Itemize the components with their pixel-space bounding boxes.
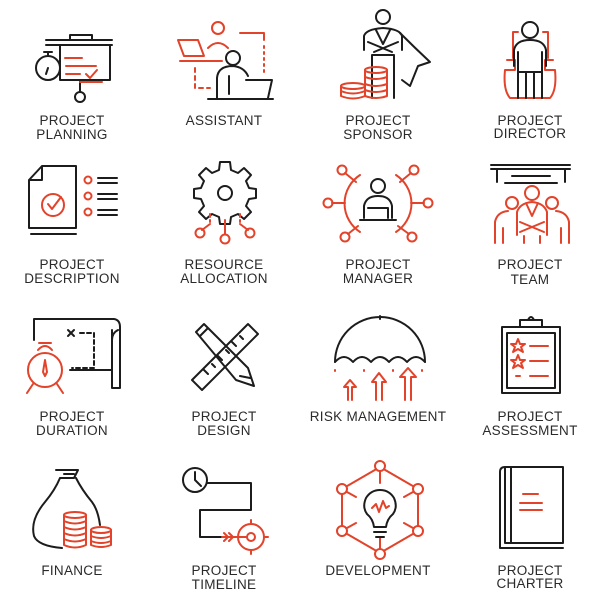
label: project timeline: TIMELINE xyxy=(192,577,256,592)
label: project sponsor: SPONSOR xyxy=(343,127,413,142)
label: project timeline: PROJECT xyxy=(191,563,257,578)
label: project charter xyxy=(496,563,564,591)
label: project description xyxy=(24,257,120,286)
label: project design xyxy=(191,409,257,438)
label: project manager: PROJECT xyxy=(345,257,411,272)
label: project description: PROJECT xyxy=(39,257,105,272)
label: project planning xyxy=(36,113,108,142)
icon: development xyxy=(337,461,423,559)
label: project sponsor: PROJECT xyxy=(345,113,411,128)
label: project sponsor xyxy=(343,113,413,142)
icon: project duration xyxy=(27,319,120,393)
label: project manager xyxy=(343,257,413,286)
label: project team: PROJECT xyxy=(497,257,563,272)
icon: project description xyxy=(29,166,117,234)
label: project assessment: ASSESSMENT xyxy=(482,423,578,438)
label: project design: DESIGN xyxy=(197,423,251,438)
label: project duration: PROJECT xyxy=(39,409,105,424)
label: project charter: PROJECT xyxy=(497,563,563,578)
label: project timeline xyxy=(191,563,257,592)
icon: project director xyxy=(505,22,555,98)
label: project duration xyxy=(36,409,108,438)
label: project manager: MANAGER xyxy=(343,271,413,286)
label: resource allocation: RESOURCE xyxy=(185,257,263,272)
label: risk management: RISK MANAGEMENT xyxy=(310,409,446,424)
icon: project planning xyxy=(36,35,112,102)
label: project charter: CHARTER xyxy=(496,576,564,591)
label: project director: PROJECT xyxy=(497,113,563,128)
label: project director xyxy=(494,113,566,141)
icon: project charter xyxy=(500,467,563,548)
label: project planning: PROJECT xyxy=(39,113,105,128)
icon: project manager xyxy=(324,166,432,242)
label: project team xyxy=(497,257,563,287)
label: project assessment xyxy=(482,409,578,438)
label: project director: DIRECTOR xyxy=(494,126,566,141)
label: project duration: DURATION xyxy=(36,423,108,438)
icon: risk management xyxy=(335,316,425,400)
icon: project assessment xyxy=(502,317,560,393)
label: development: DEVELOPMENT xyxy=(325,563,431,578)
label: project design: PROJECT xyxy=(191,409,257,424)
label: finance: FINANCE xyxy=(41,563,103,578)
icon: project team xyxy=(491,165,570,243)
icon: resource allocation xyxy=(194,162,256,244)
label: project assessment: PROJECT xyxy=(497,409,563,424)
icon: assistant xyxy=(178,22,273,99)
label: assistant: ASSISTANT xyxy=(186,113,262,128)
icon: project design xyxy=(192,324,258,390)
icon: finance xyxy=(33,470,111,548)
label: project planning: PLANNING xyxy=(36,127,108,142)
icon: project timeline xyxy=(183,468,268,554)
label: resource allocation xyxy=(180,257,268,286)
label: project team: TEAM xyxy=(511,272,549,287)
icon: project sponsor xyxy=(341,10,430,98)
label: resource allocation: ALLOCATION xyxy=(180,271,268,286)
label: project description: DESCRIPTION xyxy=(24,271,120,286)
